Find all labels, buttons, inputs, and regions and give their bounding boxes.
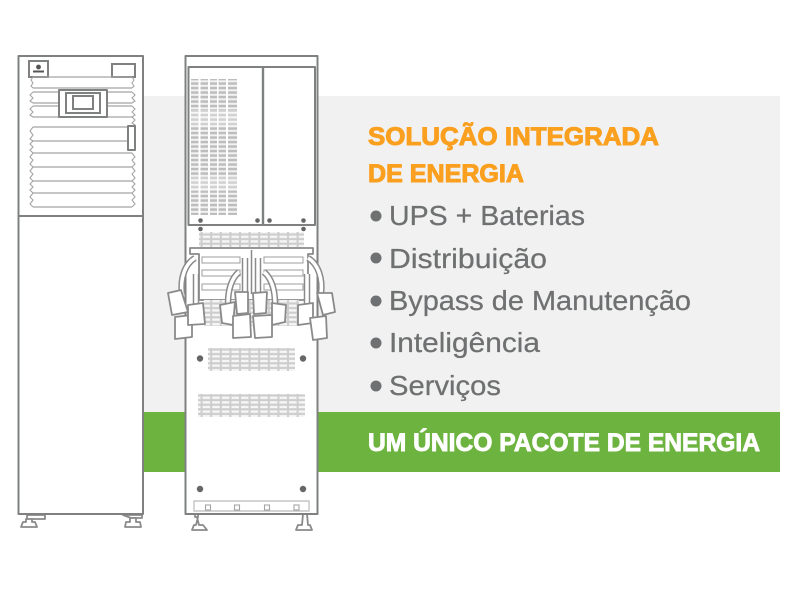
lower vent bottom [198,394,305,417]
base plate [194,501,309,511]
heading: DE ENERGIA [368,160,524,188]
left cabinet [18,56,143,514]
module screws [198,218,306,231]
power cables and connectors [168,250,335,340]
lower screws [197,355,306,492]
upper vent grid [190,79,238,215]
louvers [30,77,135,207]
heading: SOLUÇÃO INTEGRADA [368,121,659,151]
right cabinet feet [192,514,312,530]
connector blocks [175,315,192,339]
handle [128,126,135,150]
feature list: Distribuição [389,243,547,274]
feature list: Bypass de Manutenção [389,285,691,316]
logo badge [29,61,48,77]
lower vent top [208,348,295,371]
banner text: UM ÚNICO PACOTE DE ENERGIA [368,427,760,457]
feature list: Inteligência [389,327,541,358]
right cabinet [186,56,318,514]
top right label box [112,64,135,77]
grey background panel [143,96,780,412]
feature list [370,200,691,401]
cables [182,258,321,305]
green banner [143,412,780,472]
middle vent [199,232,304,247]
feature list: UPS + Baterias [389,200,585,231]
heading [368,121,659,188]
display [59,90,107,117]
distribution panel [190,248,313,326]
feature list: Serviços [389,370,501,401]
upper module [188,67,315,231]
centre post [250,250,252,294]
left cabinet feet [21,515,142,527]
